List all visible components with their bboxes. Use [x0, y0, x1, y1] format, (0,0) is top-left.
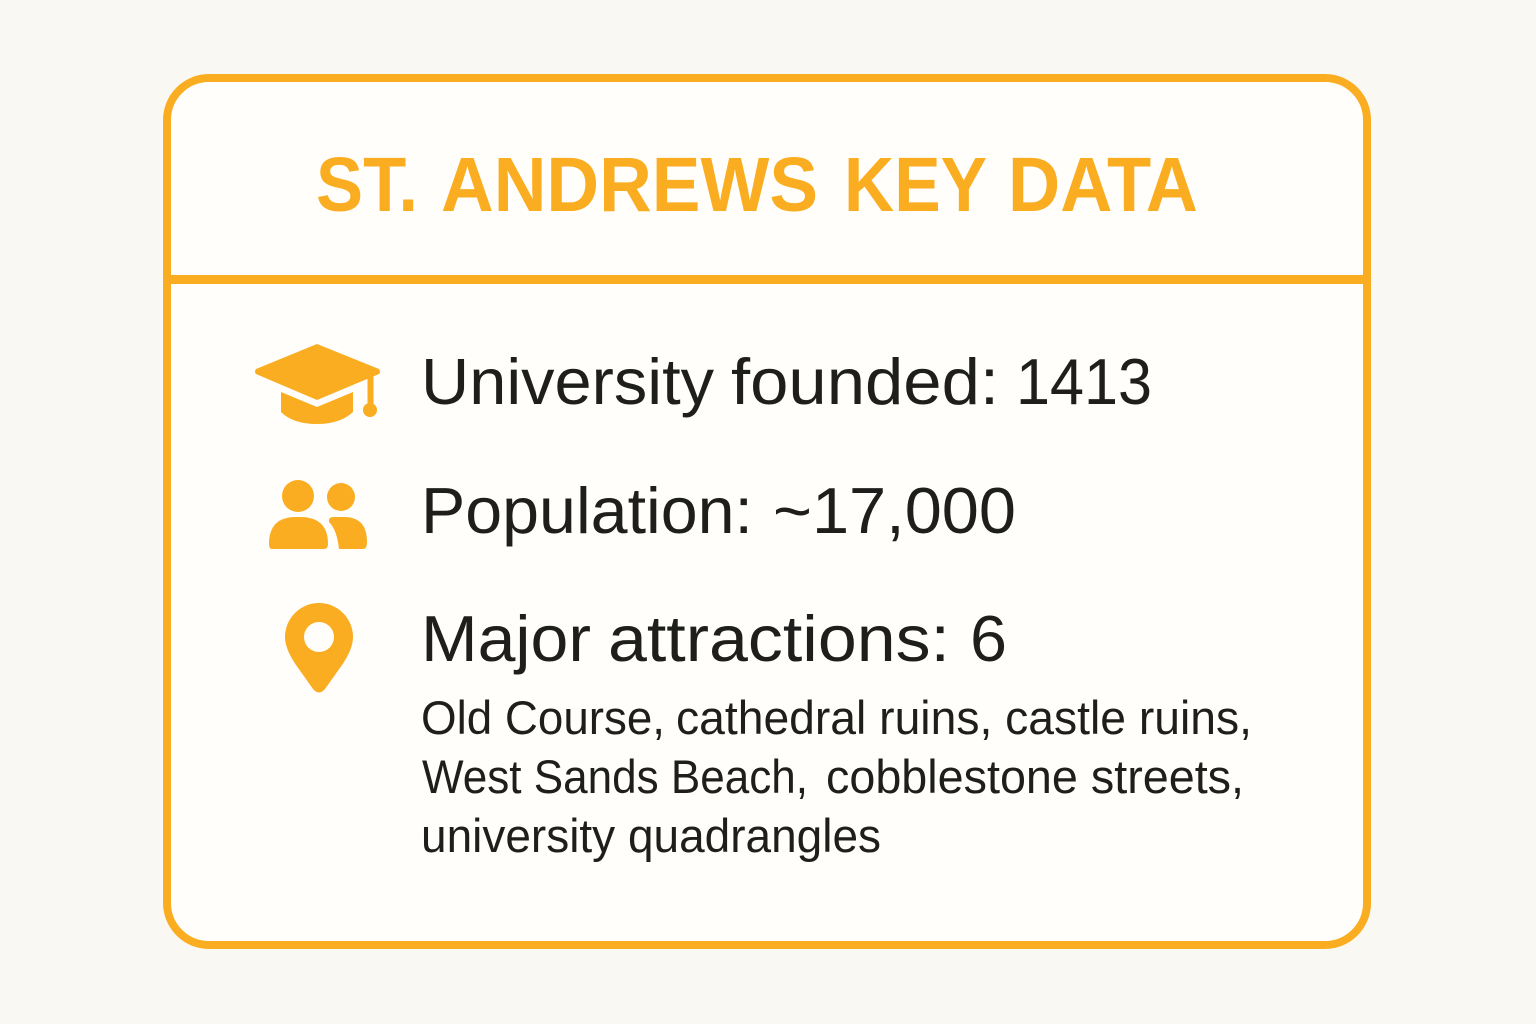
text: population: [421, 474, 1016, 547]
title: [316, 142, 1198, 228]
text: attractions list: cobblestone streets,: [826, 750, 1244, 803]
text: attractions list: [421, 691, 1252, 862]
text: university founded: University: [421, 345, 715, 418]
text: major attractions: [421, 602, 1007, 675]
text: attractions list: cathedral ruins, castle ruins,: [676, 691, 1252, 744]
text: university founded: 1413: [1016, 345, 1152, 418]
text: population: Population:: [421, 474, 753, 547]
icon: map pin: [285, 603, 353, 692]
text: major attractions: attractions:: [608, 602, 950, 675]
title: DATA: [1008, 142, 1198, 228]
icon: people: [269, 480, 367, 549]
text: attractions list: Old Course,: [421, 691, 665, 744]
text: university founded: founded:: [731, 345, 999, 418]
text: population: ~17,000: [773, 474, 1016, 547]
text: attractions list: West Sands Beach,: [422, 750, 808, 803]
title: ST.: [316, 142, 418, 228]
icon: graduation cap: [255, 344, 380, 424]
text: major attractions: 6: [970, 602, 1007, 675]
text: attractions list: university quadrangles: [421, 809, 881, 862]
title: KEY: [844, 142, 987, 228]
text: university founded: [421, 345, 1152, 418]
text: major attractions: Major: [421, 602, 591, 675]
title: ANDREWS: [441, 142, 818, 228]
panel: key data card: [167, 78, 1367, 945]
header divider: [167, 275, 1367, 284]
